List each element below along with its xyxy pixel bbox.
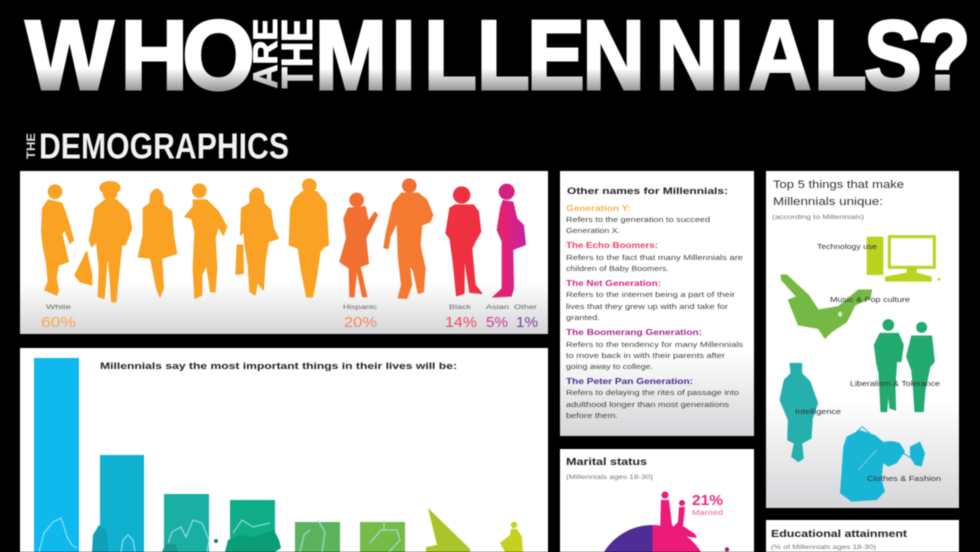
- entry: net generation: [566, 279, 736, 322]
- title: MILLENNIALS?: [315, 0, 971, 110]
- bar 1: [34, 358, 79, 552]
- entry: boomerang generation: The Boomerang Generation:: [566, 328, 702, 337]
- title: [26, 0, 971, 111]
- top 5 heading: [772, 179, 904, 221]
- entry: boomerang generation: Refers to the tendency for many Millennials: [566, 342, 744, 349]
- panel: top 5 things: [766, 171, 959, 508]
- entry: boomerang generation: [566, 328, 744, 371]
- label: asian 5%: [486, 304, 510, 331]
- label: clothes and fashion: Clothes & Fashion: [867, 476, 941, 483]
- icon: married couple: [660, 492, 697, 538]
- bar 3: [164, 494, 209, 552]
- bar 6: [360, 522, 405, 552]
- chart heading: Millennials say the most important things in their lives will be:: [100, 361, 457, 371]
- entry: boomerang generation: going away to college.: [566, 364, 653, 371]
- entry: generation y: [566, 204, 710, 235]
- icon: computer: [867, 237, 940, 282]
- entry: echo boomers: [566, 241, 743, 273]
- bar 4: [230, 500, 275, 552]
- icon: guitar player: [781, 275, 872, 338]
- entry: peter pan generation: The Peter Pan Generation:: [566, 377, 693, 386]
- silhouette: asian: [492, 184, 526, 298]
- bar 5: [295, 522, 340, 552]
- top 5 heading: Millennials unique:: [773, 196, 883, 208]
- education subheading: (% of Millennials ages 18-30): [771, 544, 876, 551]
- entry: echo boomers: The Echo Boomers:: [566, 241, 658, 250]
- label: other 1%: 1%: [516, 314, 538, 331]
- panel: educational attainment: [766, 520, 959, 552]
- entry: net generation: granted.: [566, 315, 600, 322]
- label: black 14%: [445, 304, 477, 331]
- marital subheading: (Millennials ages 18-30): [566, 474, 653, 481]
- label: 21% married: [692, 492, 723, 517]
- label: intelligence: Intelligence: [795, 409, 841, 416]
- panel: ethnicity silhouettes: [20, 171, 548, 334]
- bar 8: figure: [500, 522, 523, 552]
- panel: most important things bar chart: [20, 348, 548, 552]
- icon: clothes and hat: [840, 427, 925, 502]
- entry: net generation: Refers to the internet being a part of their: [566, 292, 736, 299]
- entry: net generation: lives that they grew up with and take for: [566, 304, 729, 311]
- education heading: Educational attainment: [771, 529, 908, 540]
- entry: peter pan generation: [566, 377, 739, 420]
- panel heading: Other names for Millennials:: [567, 186, 728, 197]
- section heading: the demographics: THE: [24, 133, 38, 159]
- label: 21% married: Married: [692, 510, 723, 517]
- label: white 60%: 60%: [41, 314, 76, 331]
- silhouettes: white group: [42, 179, 328, 302]
- bar 7: triangular shape: [426, 508, 470, 552]
- panel: marital status: [560, 449, 754, 552]
- panel: other names for millennials: [560, 171, 754, 436]
- label: other 1%: Other: [514, 304, 538, 311]
- entry: peter pan generation: adulthood longer than most generations: [566, 402, 730, 409]
- entry: peter pan generation: Refers to delaying the rites of passage into: [566, 390, 739, 397]
- label: hispanic 20%: 20%: [344, 314, 377, 331]
- title: THE: [273, 18, 322, 88]
- entry: generation y: Refers to the generation to succeed: [566, 217, 710, 224]
- entry: generation y: Generation X.: [566, 228, 620, 235]
- silhouettes: hispanic group: [340, 179, 433, 298]
- icon: graduate: [780, 363, 818, 462]
- icon: small dark figure: [725, 547, 729, 552]
- entry: echo boomers: Refers to the fact that many Millennials are: [566, 255, 743, 262]
- entry: net generation: The Net Generation:: [566, 279, 661, 288]
- label: black 14%: Black: [449, 304, 472, 311]
- marital heading: Marital status: [566, 457, 648, 468]
- label: technology use: Technology use: [817, 244, 877, 251]
- label: other 1%: [514, 304, 538, 331]
- top 5 heading: Top 5 things that make: [773, 179, 904, 191]
- bar 2: [100, 455, 144, 552]
- icon: two people: [874, 320, 934, 412]
- label: 21% married: 21%: [692, 492, 723, 509]
- title: ARE: [247, 18, 285, 88]
- label: white 60%: [41, 304, 76, 331]
- label: music and pop culture: Music & Pop culture: [830, 297, 910, 304]
- section heading: the demographics: DEMOGRAPHICS: [39, 126, 289, 166]
- entry: echo boomers: children of Baby Boomers.: [566, 266, 669, 273]
- bar icons: people outlines: [39, 518, 400, 552]
- bar icons: dark people: [92, 525, 281, 552]
- title: WHO: [26, 1, 255, 111]
- pie chart: [604, 525, 701, 552]
- label: liberalism and tolerance: Liberalism & Tolerance: [850, 381, 940, 388]
- entry: boomerang generation: to move back in with their parents after: [566, 353, 726, 360]
- label: asian 5%: Asian: [486, 304, 510, 311]
- label: hispanic 20%: Hispanic: [343, 304, 378, 311]
- silhouette: black: [446, 187, 482, 296]
- label: black 14%: 14%: [445, 314, 477, 331]
- label: hispanic 20%: [343, 304, 378, 331]
- entry: generation y: Generation Y:: [566, 204, 631, 213]
- top 5 heading: (according to Millennials): [772, 214, 864, 221]
- label: white 60%: White: [46, 304, 72, 311]
- entry: peter pan generation: before them.: [566, 413, 618, 420]
- label: asian 5%: 5%: [486, 314, 508, 331]
